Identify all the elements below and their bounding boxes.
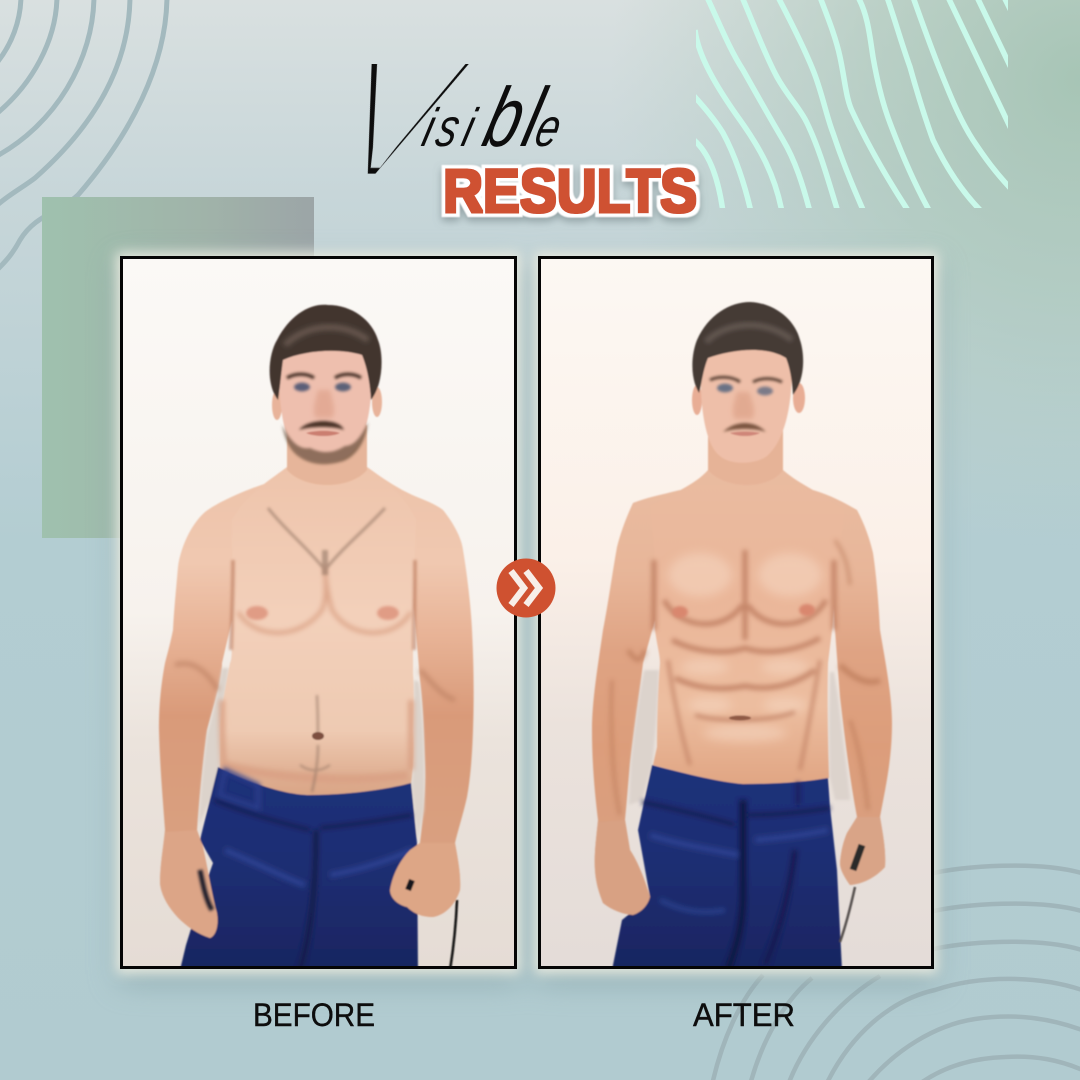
label: after: AFTER bbox=[693, 997, 795, 1033]
muscle highlights bbox=[668, 553, 822, 742]
title bold word: RESULTS bbox=[443, 157, 697, 225]
eyes and brows bbox=[710, 377, 782, 396]
left arm bbox=[592, 490, 680, 915]
hair bbox=[692, 302, 803, 395]
muscle definition bbox=[654, 550, 834, 770]
torso bbox=[650, 470, 845, 784]
title script word bbox=[313, 23, 575, 215]
moustache bbox=[723, 423, 766, 432]
rope handle bbox=[853, 845, 862, 870]
face bbox=[279, 349, 372, 463]
shorts folds bbox=[214, 770, 412, 970]
panel glows bbox=[116, 252, 938, 984]
moustache bbox=[299, 421, 344, 430]
nipples and navel bbox=[246, 606, 399, 740]
eyes and brows bbox=[287, 374, 361, 392]
ears bbox=[692, 383, 805, 415]
hair highlights bbox=[285, 327, 368, 345]
torso bbox=[220, 467, 416, 795]
after figure bbox=[592, 302, 892, 970]
arrow badge bbox=[496, 558, 556, 618]
label: before: BEFORE bbox=[253, 997, 375, 1033]
mouth bbox=[306, 431, 340, 436]
rope bbox=[840, 887, 855, 942]
mouth bbox=[730, 432, 760, 436]
decorative green square bbox=[42, 197, 314, 538]
title bbox=[313, 23, 697, 225]
wall gaps bbox=[199, 668, 424, 838]
title script word: e bbox=[529, 98, 568, 158]
title script word: isi bbox=[417, 98, 482, 158]
ears bbox=[272, 387, 382, 420]
decorative contour lines bottom right bbox=[712, 866, 1080, 1080]
right arm bbox=[367, 467, 474, 917]
panel: before photo bbox=[122, 258, 516, 970]
shorts folds bbox=[642, 782, 830, 970]
wall gaps bbox=[629, 670, 850, 805]
hair highlights bbox=[706, 325, 792, 342]
pectoral and belly shading bbox=[222, 565, 411, 779]
title script word: V bbox=[313, 23, 490, 215]
before figure bbox=[159, 305, 474, 970]
neck bbox=[707, 430, 784, 476]
decorative contour lines top left bbox=[0, 0, 167, 272]
decorative wave lines top right bbox=[694, 0, 1012, 212]
nipples and navel bbox=[672, 604, 815, 720]
arm muscle definition bbox=[611, 540, 880, 815]
panel: after photo bbox=[540, 258, 932, 970]
beard bbox=[282, 422, 368, 464]
shorts bbox=[612, 765, 842, 970]
face bbox=[701, 348, 792, 463]
shorts bbox=[180, 767, 418, 970]
hands bbox=[595, 817, 885, 915]
forearm crease shading bbox=[175, 664, 455, 700]
nose shadow bbox=[314, 390, 334, 418]
right arm bbox=[813, 490, 892, 885]
rope bbox=[450, 900, 457, 970]
hair bbox=[270, 305, 382, 400]
hands bbox=[160, 830, 460, 938]
neck bbox=[287, 425, 367, 485]
armpit shading bbox=[231, 560, 415, 650]
title script word: bl bbox=[475, 71, 555, 165]
left arm bbox=[159, 483, 267, 938]
body hair bbox=[268, 508, 385, 792]
nose shadow bbox=[733, 392, 754, 419]
